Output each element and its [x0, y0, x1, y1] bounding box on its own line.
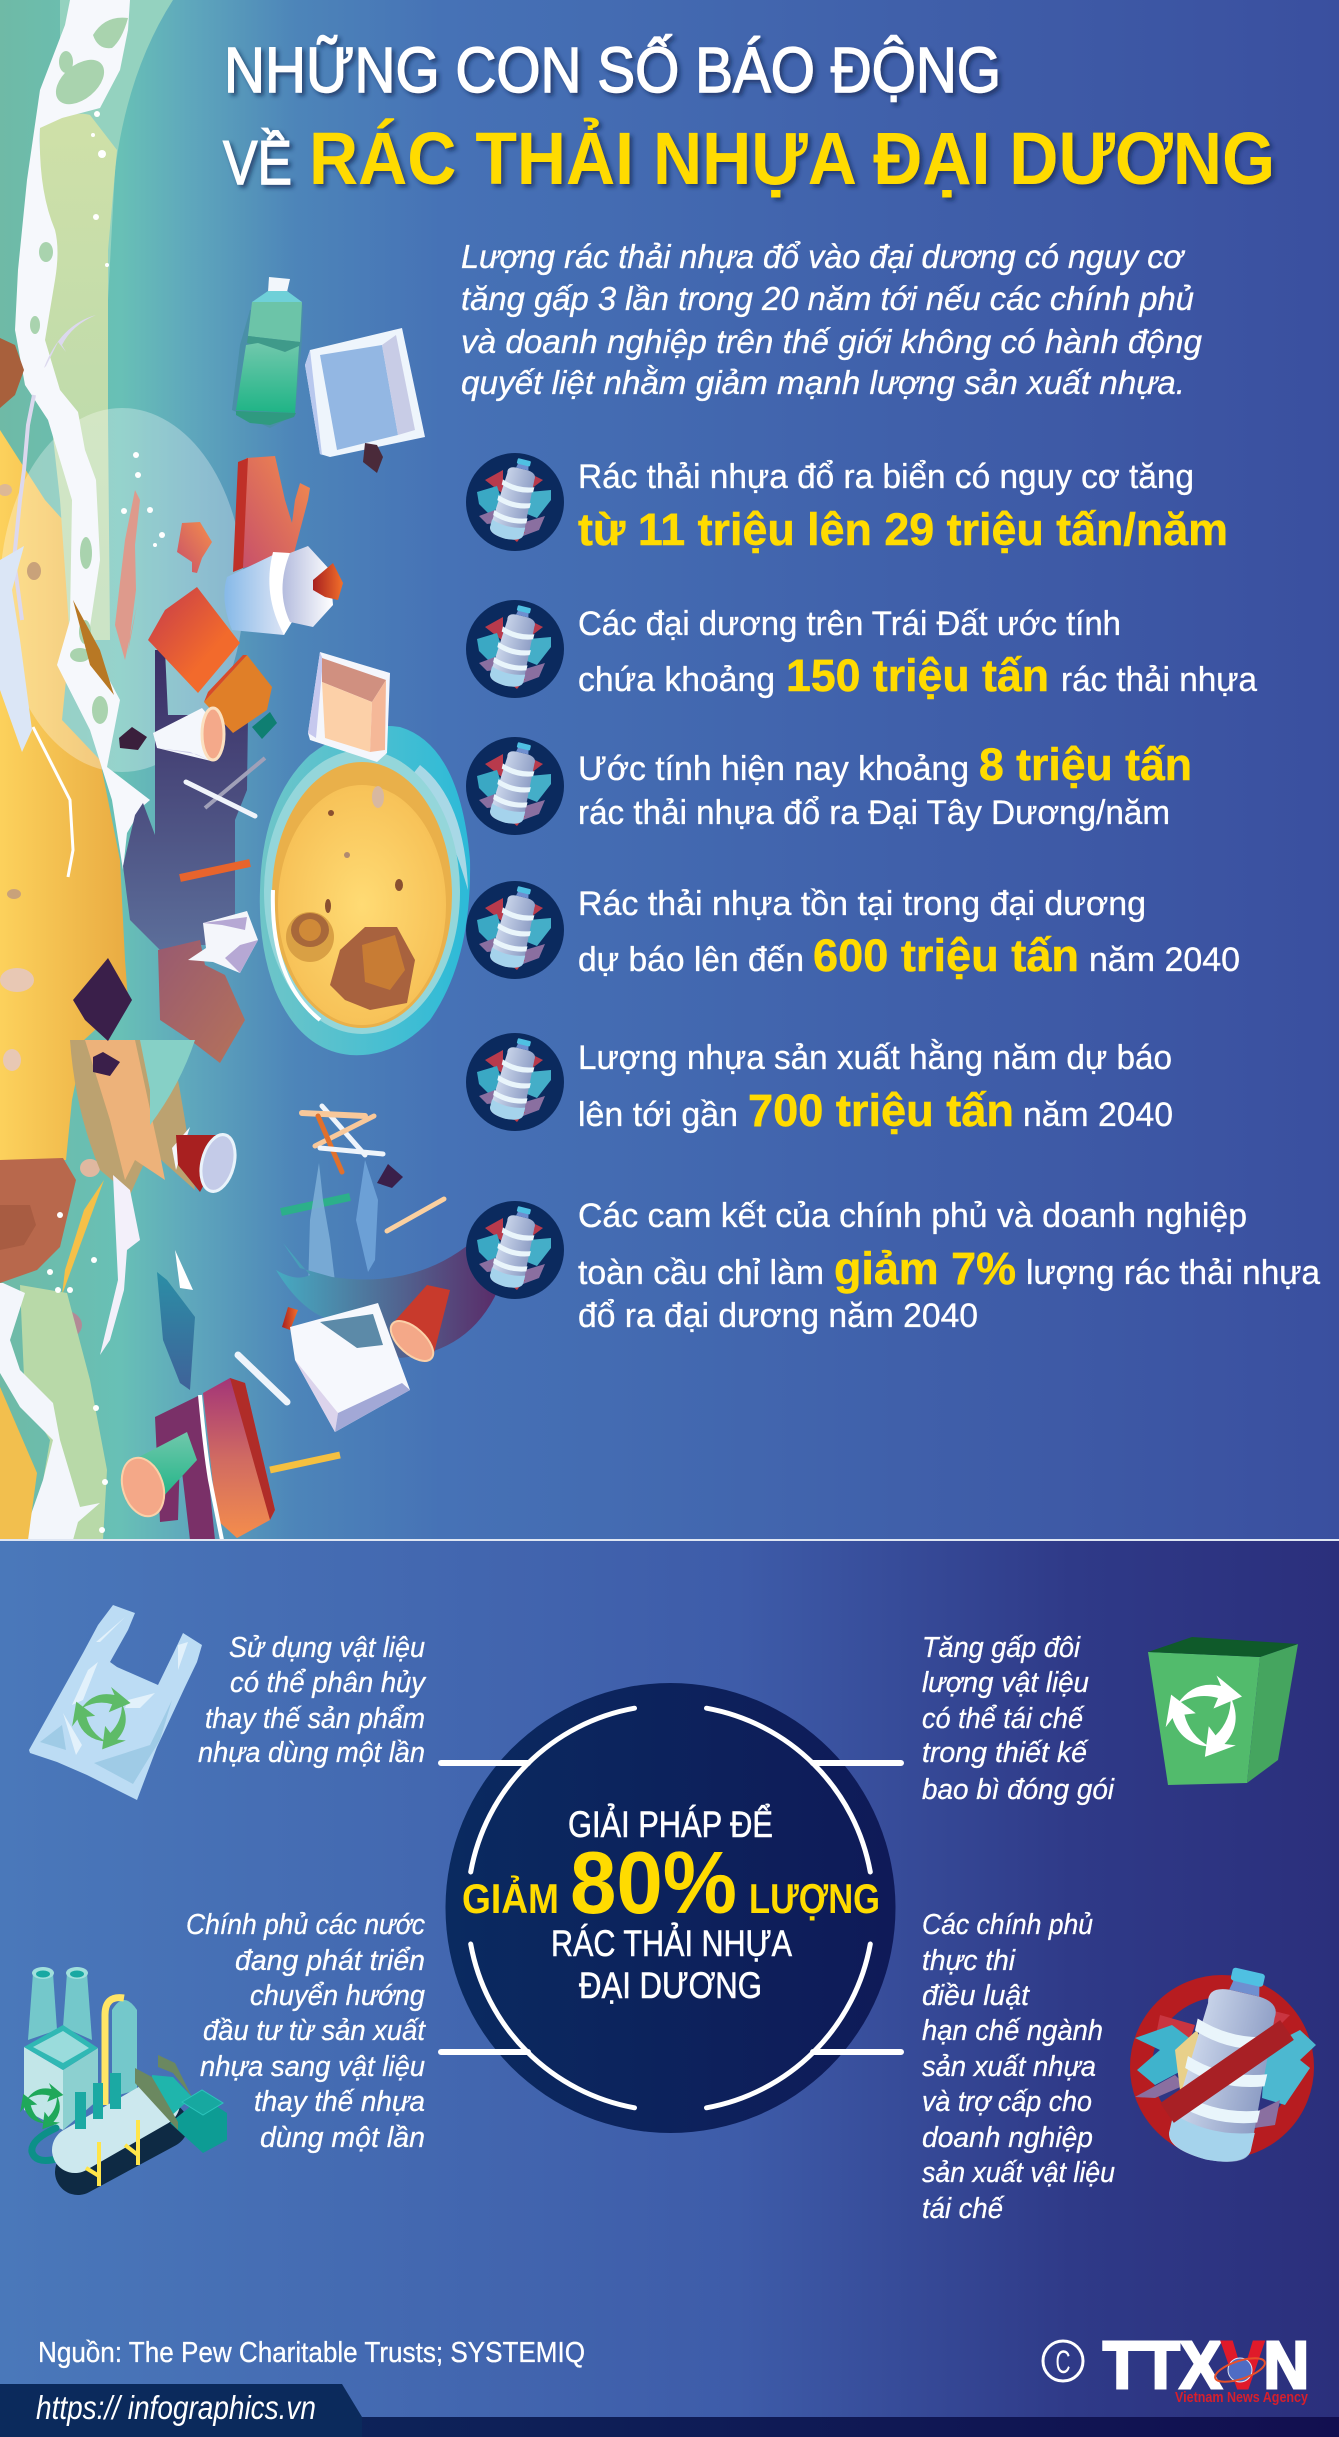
peach splash: [85, 1040, 165, 1180]
text: solution 4: sản xuất vật liệu: [922, 2157, 1115, 2189]
thin ribbon: [14, 395, 34, 620]
white jug: [282, 1303, 410, 1432]
sand: [0, 430, 128, 1160]
text: solution 4: sản xuất nhựa: [922, 2051, 1096, 2083]
illustration: beach and plastic debris: [0, 0, 498, 1540]
copyright mark: C: [1056, 2344, 1070, 2380]
foam lower: [0, 1283, 100, 1540]
item 4: 600 triệu tấn: [813, 930, 1079, 981]
feather: [44, 315, 96, 368]
item 3: rác thải nhựa đổ ra Đại Tây Dương/năm: [578, 794, 1170, 832]
item 5: Lượng nhựa sản xuất hằng năm dự báo: [578, 1039, 1172, 1077]
lighter shallows arc: [140, 1040, 195, 1125]
intro paragraph: tăng gấp 3 lần trong 20 năm tới nếu các chính phủ: [461, 280, 1194, 317]
copyright mark: [1043, 2341, 1083, 2381]
text: solution 4: thực thi: [922, 1945, 1016, 1977]
text: solution 1: Sử dụng vật liệu: [229, 1632, 425, 1664]
text: solution 1: thay thế sản phẩm: [205, 1703, 425, 1735]
dark scrap: [363, 443, 383, 473]
foam speckles: [91, 111, 165, 547]
icon: no plastic bottle: [1135, 1961, 1316, 2169]
orange boxes: [148, 587, 277, 739]
item 5: [466, 1033, 1173, 1136]
foam strip lower: [100, 1175, 140, 1355]
text: solution 2: chuyển hướng: [250, 1980, 425, 2012]
icon: bottle: [466, 737, 564, 835]
centre text: GIẢI PHÁP ĐỂ: [568, 1803, 773, 1845]
centre text: RÁC THẢI NHỰA: [551, 1923, 792, 1964]
item 3: 8 triệu tấn: [979, 739, 1192, 790]
text: solution 4: [922, 1909, 1115, 2225]
text: solution 2: đầu tư từ sản xuất: [203, 2015, 427, 2047]
foam upper: [15, 0, 150, 870]
title: [223, 34, 1275, 200]
text: solution 4: tái chế: [922, 2193, 1005, 2225]
text: solution 1: có thể phân hủy: [230, 1667, 426, 1699]
text: solution 3: có thể tái chế: [922, 1703, 1085, 1735]
item 1: từ 11 triệu lên 29 triệu tấn/năm: [578, 504, 1228, 555]
title line 1: NHỮNG CON SỐ BÁO ĐỘNG: [224, 34, 1001, 106]
green bottle: [232, 277, 303, 428]
item 3: [466, 737, 1192, 835]
item 1: [466, 453, 1228, 555]
white shard: [175, 1250, 193, 1290]
item 4: Rác thải nhựa tồn tại trong đại dương: [578, 885, 1146, 923]
dark rock 4: [377, 1164, 403, 1188]
rock gem: [177, 522, 212, 573]
text: solution 2: Chính phủ các nước: [186, 1909, 425, 1941]
icon: factory: [13, 1967, 227, 2186]
connector lines: [441, 1763, 901, 2052]
text: solution 2: thay thế nhựa: [254, 2086, 425, 2118]
divider line: [0, 1539, 1339, 1541]
red side wedge: [233, 458, 248, 572]
item 4: năm 2040: [1089, 941, 1240, 979]
island rocks: [330, 927, 415, 1010]
pebbles: [0, 484, 100, 1340]
title line 2 white: VỀ: [223, 129, 292, 198]
title line 2 yellow: RÁC THẢI NHỰA ĐẠI DƯƠNG: [309, 117, 1275, 200]
text: solution 2: nhựa sang vật liệu: [200, 2051, 425, 2083]
icon: recycle bin: [1148, 1637, 1298, 1785]
light shallow water band: [60, 0, 173, 420]
green cup: [115, 1432, 197, 1522]
rock top-left: [0, 338, 24, 408]
brown rock lower-left: [0, 1158, 76, 1283]
white sheet left: [0, 546, 32, 752]
text: solution 3: [922, 1632, 1115, 1806]
ring arcs: [471, 1708, 870, 2108]
white sand line: [33, 727, 73, 877]
crumpled paper: [158, 911, 258, 1063]
navy shadow: [123, 650, 248, 950]
text: solution 2: [186, 1909, 427, 2154]
text: solution 4: doanh nghiệp: [922, 2122, 1093, 2154]
teal shard: [157, 1272, 195, 1390]
item 5: lên tới gần: [578, 1096, 738, 1134]
centre text: ĐẠI DƯƠNG: [579, 1965, 762, 2006]
brown leaf: [73, 600, 114, 695]
item 5: năm 2040: [1023, 1096, 1173, 1134]
item 2: rác thải nhựa: [1061, 661, 1257, 699]
source text: Nguồn: The Pew Charitable Trusts; SYSTEMIQ: [38, 2337, 585, 2369]
salmon streak: [115, 490, 140, 660]
text: solution 1: nhựa dùng một lần: [198, 1737, 425, 1769]
text: solution 4: Các chính phủ: [922, 1909, 1093, 1941]
text: solution 3: trong thiết kế: [922, 1737, 1089, 1769]
centre text: [462, 1803, 880, 2006]
background: upper panel: [0, 0, 1339, 1540]
white frame tray: [305, 328, 425, 457]
sticks on navy: [180, 758, 265, 878]
peach tray: [308, 652, 390, 762]
cup and cap: [224, 546, 343, 635]
item 6: toàn cầu chỉ làm: [578, 1254, 824, 1292]
text: solution 4: và trợ cấp cho: [922, 2086, 1092, 2118]
lower tan splash: [70, 1040, 195, 1195]
icon: bottle: [466, 1033, 564, 1131]
item 3: Ước tính hiện nay khoảng: [578, 750, 969, 788]
text: solution 3: bao bì đóng gói: [922, 1774, 1115, 1806]
intro paragraph: quyết liệt nhằm giảm mạnh lượng sản xuất nhựa.: [461, 364, 1185, 401]
orange streak: [62, 1180, 104, 1295]
icon: bottle: [466, 453, 564, 551]
island: [260, 726, 470, 1055]
item 2: chứa khoảng: [578, 661, 775, 699]
horizontal white cup: [153, 708, 224, 761]
item 2: [466, 600, 1257, 701]
translucent blue shapes: [308, 1160, 378, 1290]
translucent wave bubble: [0, 408, 244, 772]
item 6: [466, 1197, 1320, 1335]
swoosh shadow: [276, 1235, 498, 1358]
text: solution 2: đang phát triển: [235, 1945, 425, 1977]
foam holes: [30, 18, 128, 724]
intro paragraph: và doanh nghiệp trên thế giới không có hành động: [461, 323, 1203, 360]
icon: plastic bag: [29, 1605, 202, 1800]
red cup 2: [384, 1285, 450, 1368]
item 5: 700 triệu tấn: [748, 1085, 1014, 1136]
item 4: [466, 881, 1240, 981]
item 4: dự báo lên đến: [578, 941, 804, 979]
gold stick: [270, 1455, 340, 1470]
sticks cluster: [281, 1106, 444, 1231]
centre circle: [441, 1683, 901, 2133]
dark rock 1: [119, 727, 147, 750]
footer bar: [0, 2417, 1339, 2437]
icon: bottle: [466, 881, 564, 979]
text: solution 4: hạn chế ngành: [922, 2015, 1103, 2047]
board: [200, 1378, 275, 1540]
icon: bottle: [466, 600, 564, 698]
dark rock 2: [73, 958, 132, 1041]
text: solution 2: dùng một lần: [260, 2122, 425, 2154]
logo: TTXVN: TTXVN: [1103, 2328, 1309, 2403]
item 6: đổ ra đại dương năm 2040: [578, 1297, 978, 1335]
intro paragraph: Lượng rác thải nhựa đổ vào đại dương có nguy cơ: [461, 238, 1186, 275]
text: solution 1: [198, 1632, 426, 1769]
intro paragraph: [461, 238, 1203, 401]
url: https:// infographics.vn: [36, 2389, 316, 2426]
icon: bottle: [466, 1201, 564, 1299]
white stick: [238, 1355, 287, 1402]
item 2: 150 triệu tấn: [786, 650, 1049, 701]
orange wedge: [243, 456, 310, 568]
item 6: lượng rác thải nhựa: [1026, 1254, 1320, 1292]
item 2: Các đại dương trên Trái Đất ước tính: [578, 605, 1121, 643]
text: solution 3: Tăng gấp đôi: [922, 1632, 1081, 1664]
centre text: LƯỢNG: [749, 1875, 880, 1922]
text: solution 4: điều luật: [922, 1980, 1031, 2012]
dark rock 3: [93, 1052, 120, 1076]
text: solution 3: lượng vật liệu: [922, 1667, 1089, 1699]
purple frame: [155, 1395, 215, 1540]
logo: TTXVN: Vietnam News Agency: [1175, 2389, 1309, 2406]
background: lower panel: [0, 1540, 1339, 2437]
lower left sand: [0, 1387, 37, 1540]
green shallows lower: [20, 1285, 107, 1540]
item 6: giảm 7%: [834, 1243, 1016, 1294]
pale green shallows: [40, 114, 117, 640]
centre text: 80%: [570, 1833, 737, 1932]
item 1: Rác thải nhựa đổ ra biển có nguy cơ tăng: [578, 458, 1194, 496]
centre text: GIẢM: [462, 1874, 559, 1922]
item 6: Các cam kết của chính phủ và doanh nghiệp: [578, 1197, 1247, 1235]
foam dots lower: [47, 1212, 108, 1533]
footer tab: [0, 2384, 362, 2437]
red cup: [172, 1127, 241, 1195]
